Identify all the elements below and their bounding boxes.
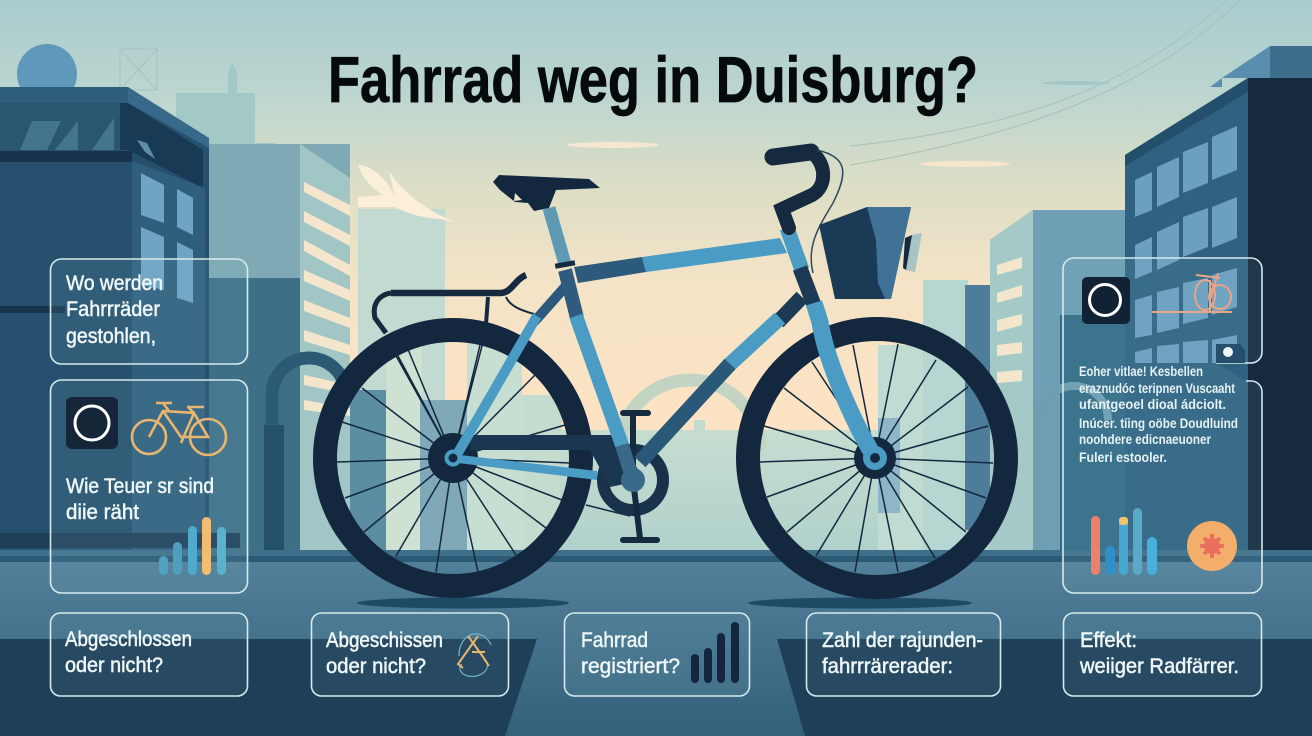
panel: where are bikes stolen: gestohlen, — [66, 325, 156, 348]
panel: number of bikes — [806, 613, 1000, 696]
panel: bike registered: registriert? — [581, 655, 680, 678]
icon: lock symbol — [458, 634, 491, 676]
head tube and fork — [787, 228, 887, 470]
panel: effect: Effekt: — [1080, 629, 1137, 652]
panel: locked or not — [50, 613, 248, 696]
panel: locked or not with icon: oder nicht? — [326, 655, 426, 678]
saddle — [493, 175, 600, 211]
down tube — [640, 297, 802, 462]
bar chart — [691, 622, 739, 683]
rear hub cap — [446, 452, 460, 464]
rear wheel — [325, 330, 581, 586]
text block: noohdere edicnaeuoner — [1079, 431, 1211, 447]
panel: number of bikes: Zahl der rajunden- — [822, 629, 983, 652]
text block: Inúcer. tíing oöbe Doudluind — [1079, 415, 1238, 431]
bar chart — [159, 517, 226, 575]
sky background — [0, 0, 1312, 560]
panel: locked or not: oder nicht? — [65, 654, 163, 677]
seat stay — [455, 287, 565, 458]
panel: where are bikes stolen: Fahrrräder — [66, 298, 160, 321]
text block: Eoher vitlae! Kesbellen — [1079, 363, 1203, 379]
front wheel — [748, 329, 1006, 587]
text block: Fuleri estooler. — [1079, 449, 1167, 465]
panel: effect — [1064, 613, 1262, 696]
seat post — [549, 208, 565, 264]
right foreground building — [1125, 46, 1312, 550]
panel: bike price: Wie Teuer sr sind — [66, 475, 214, 498]
panel: locked or not with icon: Abgeschissen — [326, 629, 443, 652]
chainring and crank — [586, 410, 663, 543]
bar chart — [1091, 508, 1157, 575]
title: Fahrrad weg in Duisburg? — [328, 43, 978, 116]
panel: locked or not: Abgeschlossen — [65, 628, 192, 651]
text block: eraznudóc teripnen Vuscaaht — [1079, 380, 1235, 396]
icon: circle badge — [1082, 277, 1130, 324]
handlebar — [773, 152, 823, 228]
panel: where are bikes stolen — [50, 259, 248, 364]
icon: pink bicycle — [1152, 273, 1232, 312]
left foreground building — [0, 87, 240, 550]
panel: bike price: diie räht — [66, 501, 139, 524]
text block: ufantgeoel dioal ádciolt. — [1079, 396, 1226, 412]
panel: number of bikes: fahrrrärerader: — [822, 655, 953, 678]
panel: effect: weiiger Radfärrer. — [1079, 655, 1239, 678]
front basket — [819, 207, 922, 299]
panel: right info frame — [1063, 258, 1262, 593]
panel: bike price — [50, 380, 248, 593]
panel: where are bikes stolen: Wo werden — [66, 272, 163, 295]
text block — [1079, 363, 1238, 465]
icon: orange gear circle — [1187, 521, 1237, 571]
panel: locked or not with icon — [312, 613, 508, 696]
street ground — [0, 550, 1312, 736]
city skyline background — [17, 0, 1240, 550]
panel: bike registered: Fahrrad — [581, 629, 648, 652]
top tube — [555, 238, 787, 283]
panel: bike registered — [564, 613, 750, 696]
chain stays — [458, 435, 644, 487]
bottom bracket — [621, 468, 645, 492]
bicycle illustration — [325, 150, 1006, 587]
icon: circle badge — [66, 397, 118, 449]
brake cable — [811, 150, 843, 273]
icon: orange bicycle — [132, 403, 226, 455]
icon: small chip — [1216, 344, 1245, 363]
seat tube — [565, 270, 633, 480]
rear rack — [374, 275, 534, 333]
